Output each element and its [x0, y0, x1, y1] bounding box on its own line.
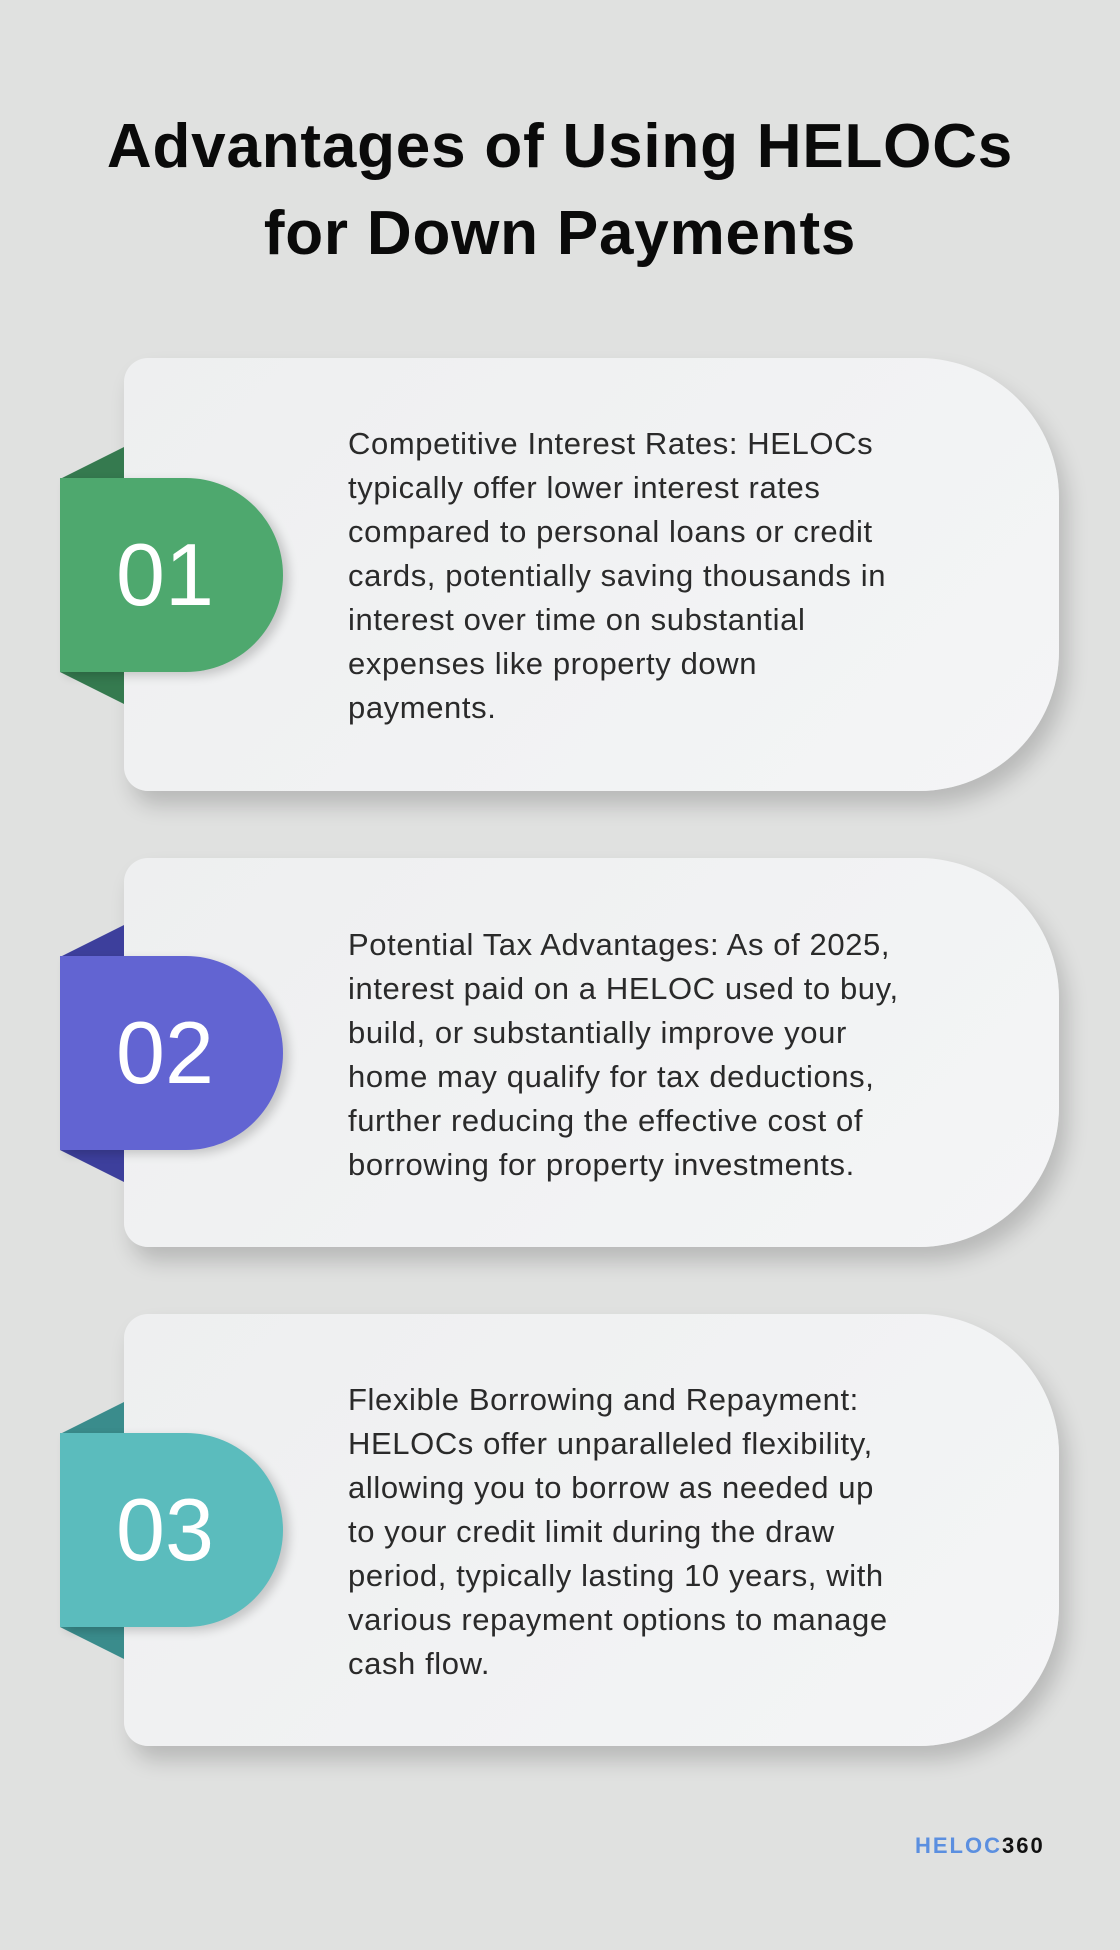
text 1: interest over time on substantial: [348, 602, 805, 637]
number tab 02: [60, 956, 283, 1150]
text 3: [348, 1382, 888, 1681]
panel: card 2: [60, 858, 1076, 1270]
number tab 03: 03: [116, 1480, 214, 1579]
text 1: payments.: [348, 690, 496, 725]
text 3: to your credit limit during the draw: [348, 1514, 835, 1549]
text 3: allowing you to borrow as needed up: [348, 1470, 874, 1505]
text 1: Competitive Interest Rates: HELOCs: [348, 426, 873, 461]
title: for Down Payments: [264, 199, 856, 268]
number tab 01: 01: [116, 525, 214, 624]
text 3: period, typically lasting 10 years, with: [348, 1558, 884, 1593]
text 2: borrowing for property investments.: [348, 1147, 855, 1182]
number tab 03: [60, 1433, 283, 1627]
logo: HELOC360: [915, 1833, 1045, 1858]
text 3: Flexible Borrowing and Repayment:: [348, 1382, 859, 1417]
panel: card 1: [60, 358, 1076, 814]
number tab 02: 02: [116, 1003, 214, 1102]
number tab 01: [60, 478, 283, 672]
text 3: various repayment options to manage: [348, 1602, 888, 1637]
text 2: further reducing the effective cost of: [348, 1103, 863, 1138]
text 3: cash flow.: [348, 1646, 490, 1681]
text 3: HELOCs offer unparalleled flexibility,: [348, 1426, 873, 1461]
text 1: [348, 426, 886, 725]
text 2: interest paid on a HELOC used to buy,: [348, 971, 899, 1006]
title: Advantages of Using HELOCs: [107, 112, 1013, 181]
text 1: compared to personal loans or credit: [348, 514, 873, 549]
text 2: home may qualify for tax deductions,: [348, 1059, 874, 1094]
text 1: typically offer lower interest rates: [348, 470, 820, 505]
text 2: [348, 927, 899, 1182]
text 2: Potential Tax Advantages: As of 2025,: [348, 927, 890, 962]
title: [107, 112, 1013, 268]
panel: card 3: [60, 1314, 1076, 1768]
text 1: cards, potentially saving thousands in: [348, 558, 886, 593]
text 2: build, or substantially improve your: [348, 1015, 847, 1050]
text 1: expenses like property down: [348, 646, 757, 681]
